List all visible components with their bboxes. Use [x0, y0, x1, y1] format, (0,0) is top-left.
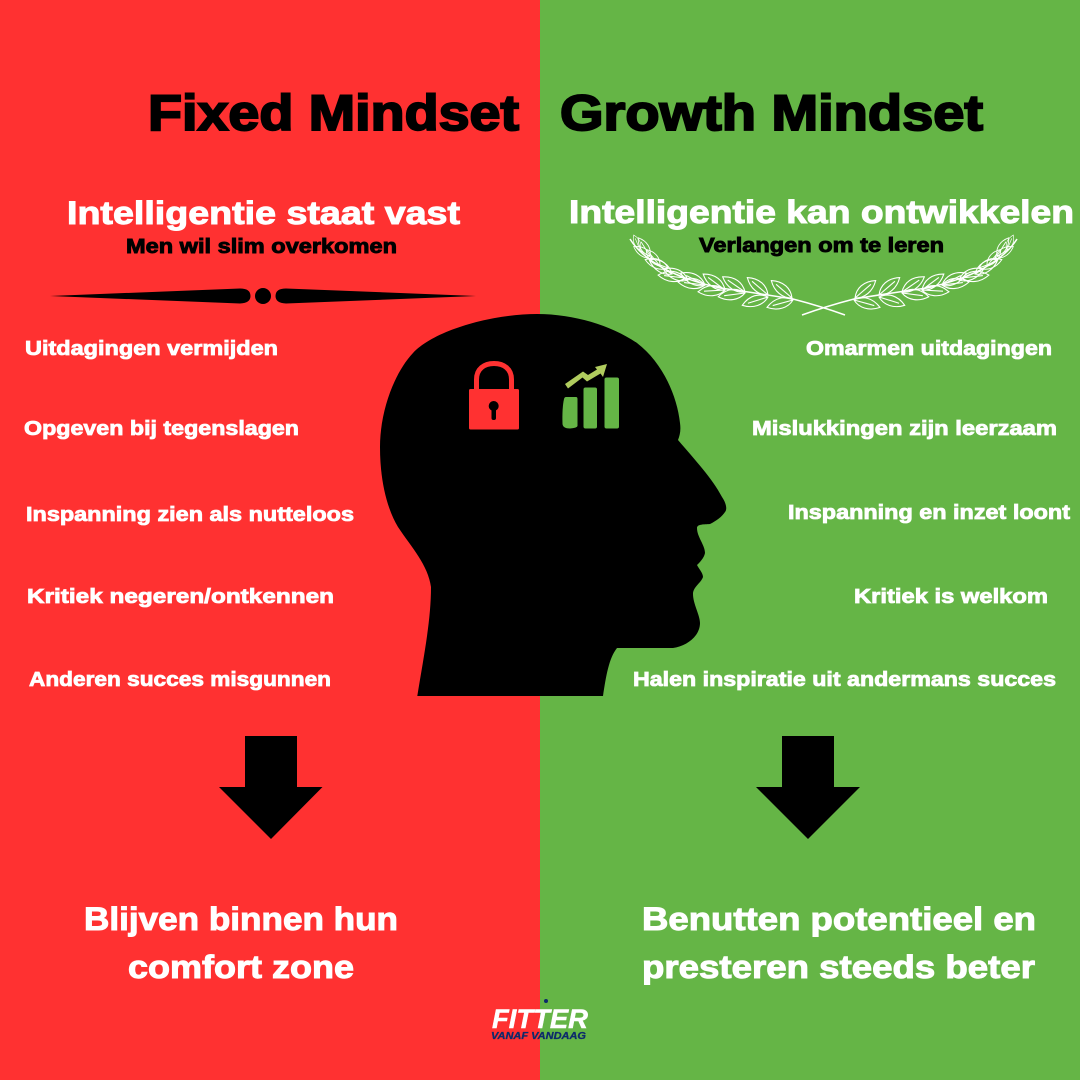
heading: growth intelligence: Intelligentie kan ontwikkelen: [569, 194, 1074, 230]
panel: fixed mindset background: [0, 0, 540, 1080]
item: Omarmen uitdagingen: [806, 338, 1052, 360]
item: Anderen succes misgunnen: [29, 669, 331, 691]
right laurel branch: [802, 234, 1017, 315]
outcome: growth: presteren steeds beter: [642, 949, 1035, 985]
icon: growth chart: [562, 364, 619, 428]
ornament: black divider: [50, 288, 476, 304]
item: Inspanning zien als nutteloos: [26, 504, 354, 526]
outcome: fixed: [84, 901, 398, 985]
logo: Fitter Vanaf Vandaag: VANAF VANDAAG: [491, 1030, 586, 1042]
logo: Fitter Vanaf Vandaag: FITTER: [492, 1004, 588, 1034]
outcome: growth: [642, 901, 1036, 985]
arrow: fixed outcome: [219, 736, 322, 839]
subheading: fixed: Men wil slim overkomen: [126, 236, 397, 258]
title: Fixed Mindset: Fixed Mindset: [148, 85, 519, 141]
list: fixed mindset traits: [24, 338, 354, 691]
outcome: growth: Benutten potentieel en: [642, 901, 1036, 937]
heading: fixed intelligence: Intelligentie staat vast: [67, 195, 460, 231]
subheading: growth: Verlangen om te leren: [699, 235, 944, 257]
title: Growth Mindset: Growth Mindset: [560, 85, 983, 141]
icon: head silhouette: [380, 314, 726, 696]
outcome: fixed: Blijven binnen hun: [84, 901, 398, 937]
logo: Fitter Vanaf Vandaag: [491, 999, 588, 1042]
arrow: growth outcome: [756, 736, 860, 839]
panel: growth mindset background: [540, 0, 1080, 1080]
item: Halen inspiratie uit andermans succes: [633, 669, 1056, 691]
item: Mislukkingen zijn leerzaam: [752, 418, 1057, 440]
item: Kritiek is welkom: [854, 586, 1048, 608]
chart arrow: [565, 364, 607, 388]
item: Inspanning en inzet loont: [788, 502, 1070, 524]
icon: padlock: [469, 364, 519, 430]
chart bars: [562, 378, 619, 428]
item: Kritiek negeren/ontkennen: [27, 586, 334, 608]
left laurel branch: [630, 234, 845, 315]
ornament: laurel branches: [630, 234, 1017, 315]
item: Uitdagingen vermijden: [25, 338, 278, 360]
item: Opgeven bij tegenslagen: [24, 418, 299, 440]
list: growth mindset traits: [633, 338, 1070, 691]
outcome: fixed: comfort zone: [128, 949, 354, 985]
